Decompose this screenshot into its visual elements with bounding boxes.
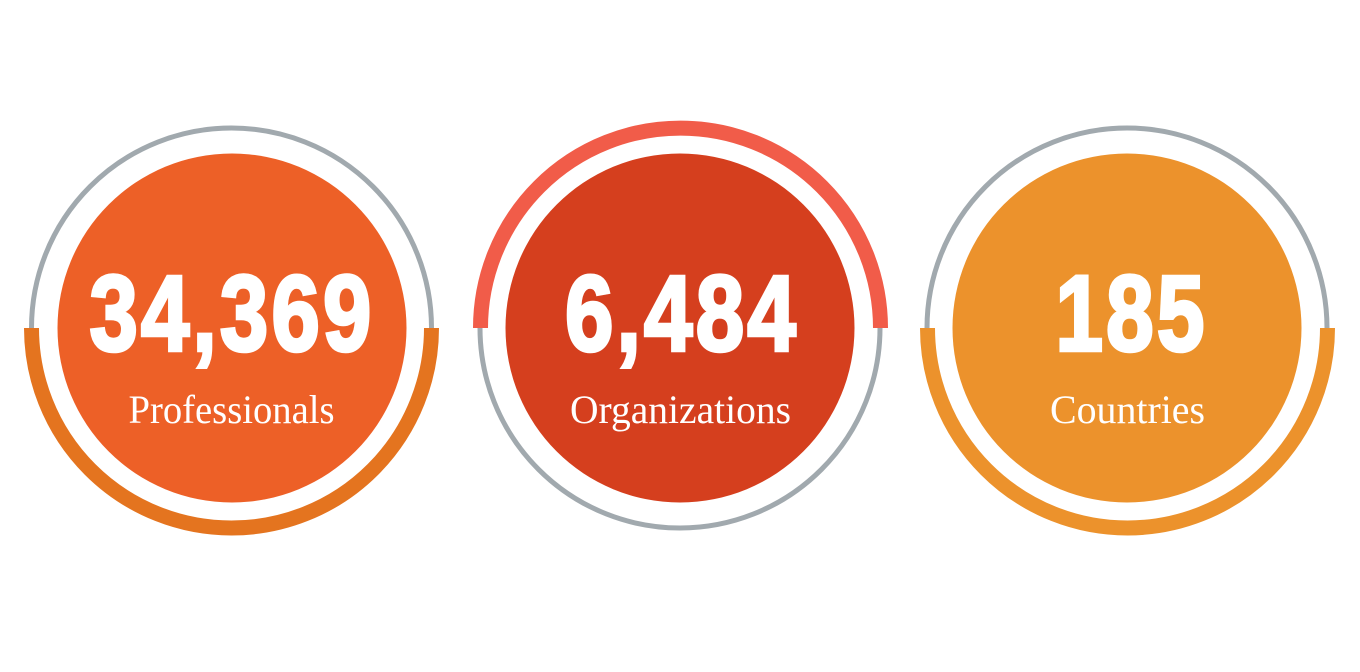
disc — [506, 154, 854, 502]
label: Professionals — [128, 387, 334, 432]
panel: professionals — [32, 128, 432, 528]
label: Countries — [1050, 387, 1205, 432]
number: 6,484 — [565, 252, 799, 374]
ring: grey outline — [927, 128, 1327, 528]
disc — [58, 154, 406, 502]
ring: grey outline — [32, 128, 432, 528]
ring: red upper arc — [480, 128, 880, 328]
number: 185 — [1056, 252, 1208, 374]
ring: amber lower arc — [928, 328, 1328, 528]
disc — [952, 154, 1302, 502]
ring: grey outline — [480, 128, 880, 528]
panel: countries — [927, 128, 1328, 528]
ring: orange lower arc — [32, 328, 432, 528]
number: 34,369 — [90, 252, 374, 374]
label: Organizations — [570, 387, 791, 432]
panel: organizations — [480, 128, 880, 528]
